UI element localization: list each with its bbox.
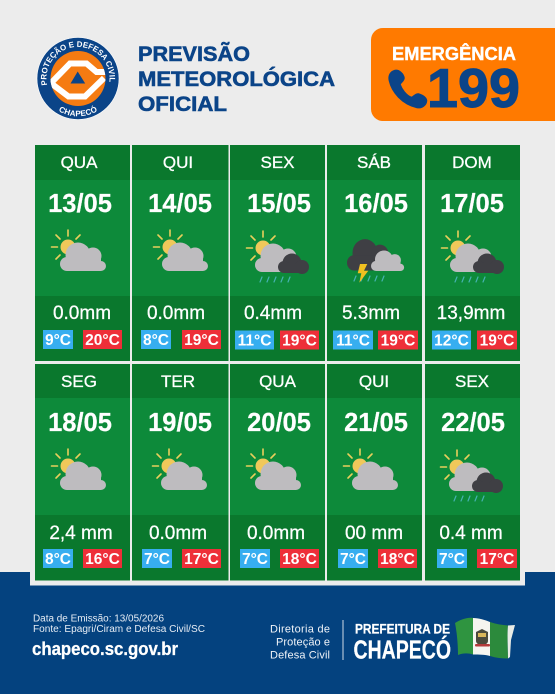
panel: QUA 13/05: 0.0mm [53,303,111,324]
panel: SEX 22/05 [425,364,520,580]
panel: DOM 17/05: 13,9mm [437,303,505,324]
footer source text: Fonte: Epagri/Ciram e Defesa Civil/SC [33,624,205,635]
panel: QUA 13/05: 13/05 [48,190,112,218]
logo: Proteção e Defesa Civil [36,37,120,120]
panel: SEX 15/05: 11°C [238,332,271,350]
prefeitura wordmark [354,622,451,664]
forecast frame [30,140,525,586]
panel: QUI 14/05: 8°C [143,332,169,349]
panel: DOM 17/05: 19°C [480,332,514,350]
panel: SEX 22/05: 0.4 mm [439,523,503,544]
panel: QUI 14/05: 14/05 [148,190,212,218]
panel: QUA 13/05: QUA [61,153,98,172]
panel: TER 19/05: 17°C [184,551,219,568]
panel: QUI 21/05: 18°C [380,551,415,568]
prefeitura wordmark: CHAPECÓ [354,634,451,664]
panel: SEG 18/05: 18/05 [48,409,112,437]
panel: QUA 20/05: 7°C [242,551,268,568]
department text: Proteção e [276,636,330,648]
panel: DOM 17/05 [425,145,520,361]
panel: QUI 21/05 [327,364,422,580]
icon: phone [389,70,426,108]
panel: SEX 15/05: 19°C [282,332,317,350]
panel: SÁB 16/05 [327,145,422,361]
department text [270,624,330,662]
panel: DOM 17/05: DOM [452,153,492,172]
title: METEOROLÓGICA [138,67,335,91]
website: chapeco.sc.gov.br [32,639,178,659]
panel: TER 19/05: 19/05 [148,409,212,437]
panel: SEX 22/05: 7°C [439,551,465,568]
logo: Proteção e Defesa Civil: PROTEÇÃO E DEFESA CIVIL [40,41,116,86]
panel: SEX 22/05: SEX [455,372,489,391]
panel: QUA 13/05 [35,145,130,361]
panel: QUA 13/05: 20°C [85,332,120,349]
panel: SEX 15/05: 15/05 [247,190,311,218]
panel: QUA 13/05: 9°C [45,332,71,349]
footer source text: Data de Emissão: 13/05/2026 [33,614,164,624]
prefeitura wordmark: PREFEITURA DE [355,622,450,636]
panel: TER 19/05: 7°C [144,551,170,568]
panel: QUI 21/05: 21/05 [344,409,408,437]
panel: SEX 15/05: 0.4mm [244,303,302,324]
panel: QUI 14/05: 0.0mm [147,303,205,324]
emergency callout: EMERGÊNCIA [392,43,516,64]
panel: SEX 15/05 [230,145,325,361]
panel: SEX 22/05: 22/05 [441,409,505,437]
panel: SÁB 16/05: 19°C [381,332,415,350]
panel: SÁB 16/05: 5.3mm [342,303,400,324]
panel: QUI 14/05: 19°C [184,332,219,349]
panel: SEX 22/05: 17°C [480,551,514,568]
panel: QUA 20/05: 20/05 [247,409,311,437]
panel: SEG 18/05: 16°C [85,551,120,568]
title: PREVISÃO [138,43,250,66]
panel: TER 19/05: 0.0mm [149,523,207,544]
panel: SÁB 16/05: SÁB [357,153,391,172]
panel: QUI 14/05: QUI [163,153,193,172]
icon: storm [347,239,404,283]
panel: QUA 20/05: 0.0mm [247,523,305,544]
panel: QUI 21/05: 00 mm [345,523,403,544]
title [138,43,335,116]
title: OFICIAL [138,93,227,116]
panel: QUA 20/05: 18°C [282,551,317,568]
panel: DOM 17/05: 17/05 [440,190,504,218]
divider [342,620,344,660]
panel: QUI 21/05: 7°C [340,551,366,568]
panel: QUA 20/05: QUA [259,372,297,391]
panel: SEG 18/05 [35,364,130,580]
emergency callout [371,28,555,121]
department text: Diretoria de [270,624,330,636]
panel: SÁB 16/05: 16/05 [344,190,408,218]
panel: QUI 21/05: QUI [359,372,389,391]
panel: SEG 18/05: SEG [61,372,97,391]
panel: SEG 18/05: 8°C [45,551,71,568]
panel: SEG 18/05: 2,4 mm [49,523,113,544]
panel: SEX 15/05: SEX [260,153,295,172]
emergency callout: 199 [427,57,520,119]
icon: Chapecó flag [455,618,515,658]
footer source text [33,614,205,635]
panel: DOM 17/05: 12°C [434,332,469,350]
panel: SÁB 16/05: 11°C [336,332,370,350]
panel: TER 19/05: TER [161,372,195,391]
panel: QUA 20/05 [230,364,325,580]
logo: Proteção e Defesa Civil: CHAPECÓ [59,105,96,116]
panel: TER 19/05 [132,364,228,580]
panel: QUI 14/05 [132,145,228,361]
department text: Defesa Civil [270,650,330,662]
footer band [0,572,555,694]
